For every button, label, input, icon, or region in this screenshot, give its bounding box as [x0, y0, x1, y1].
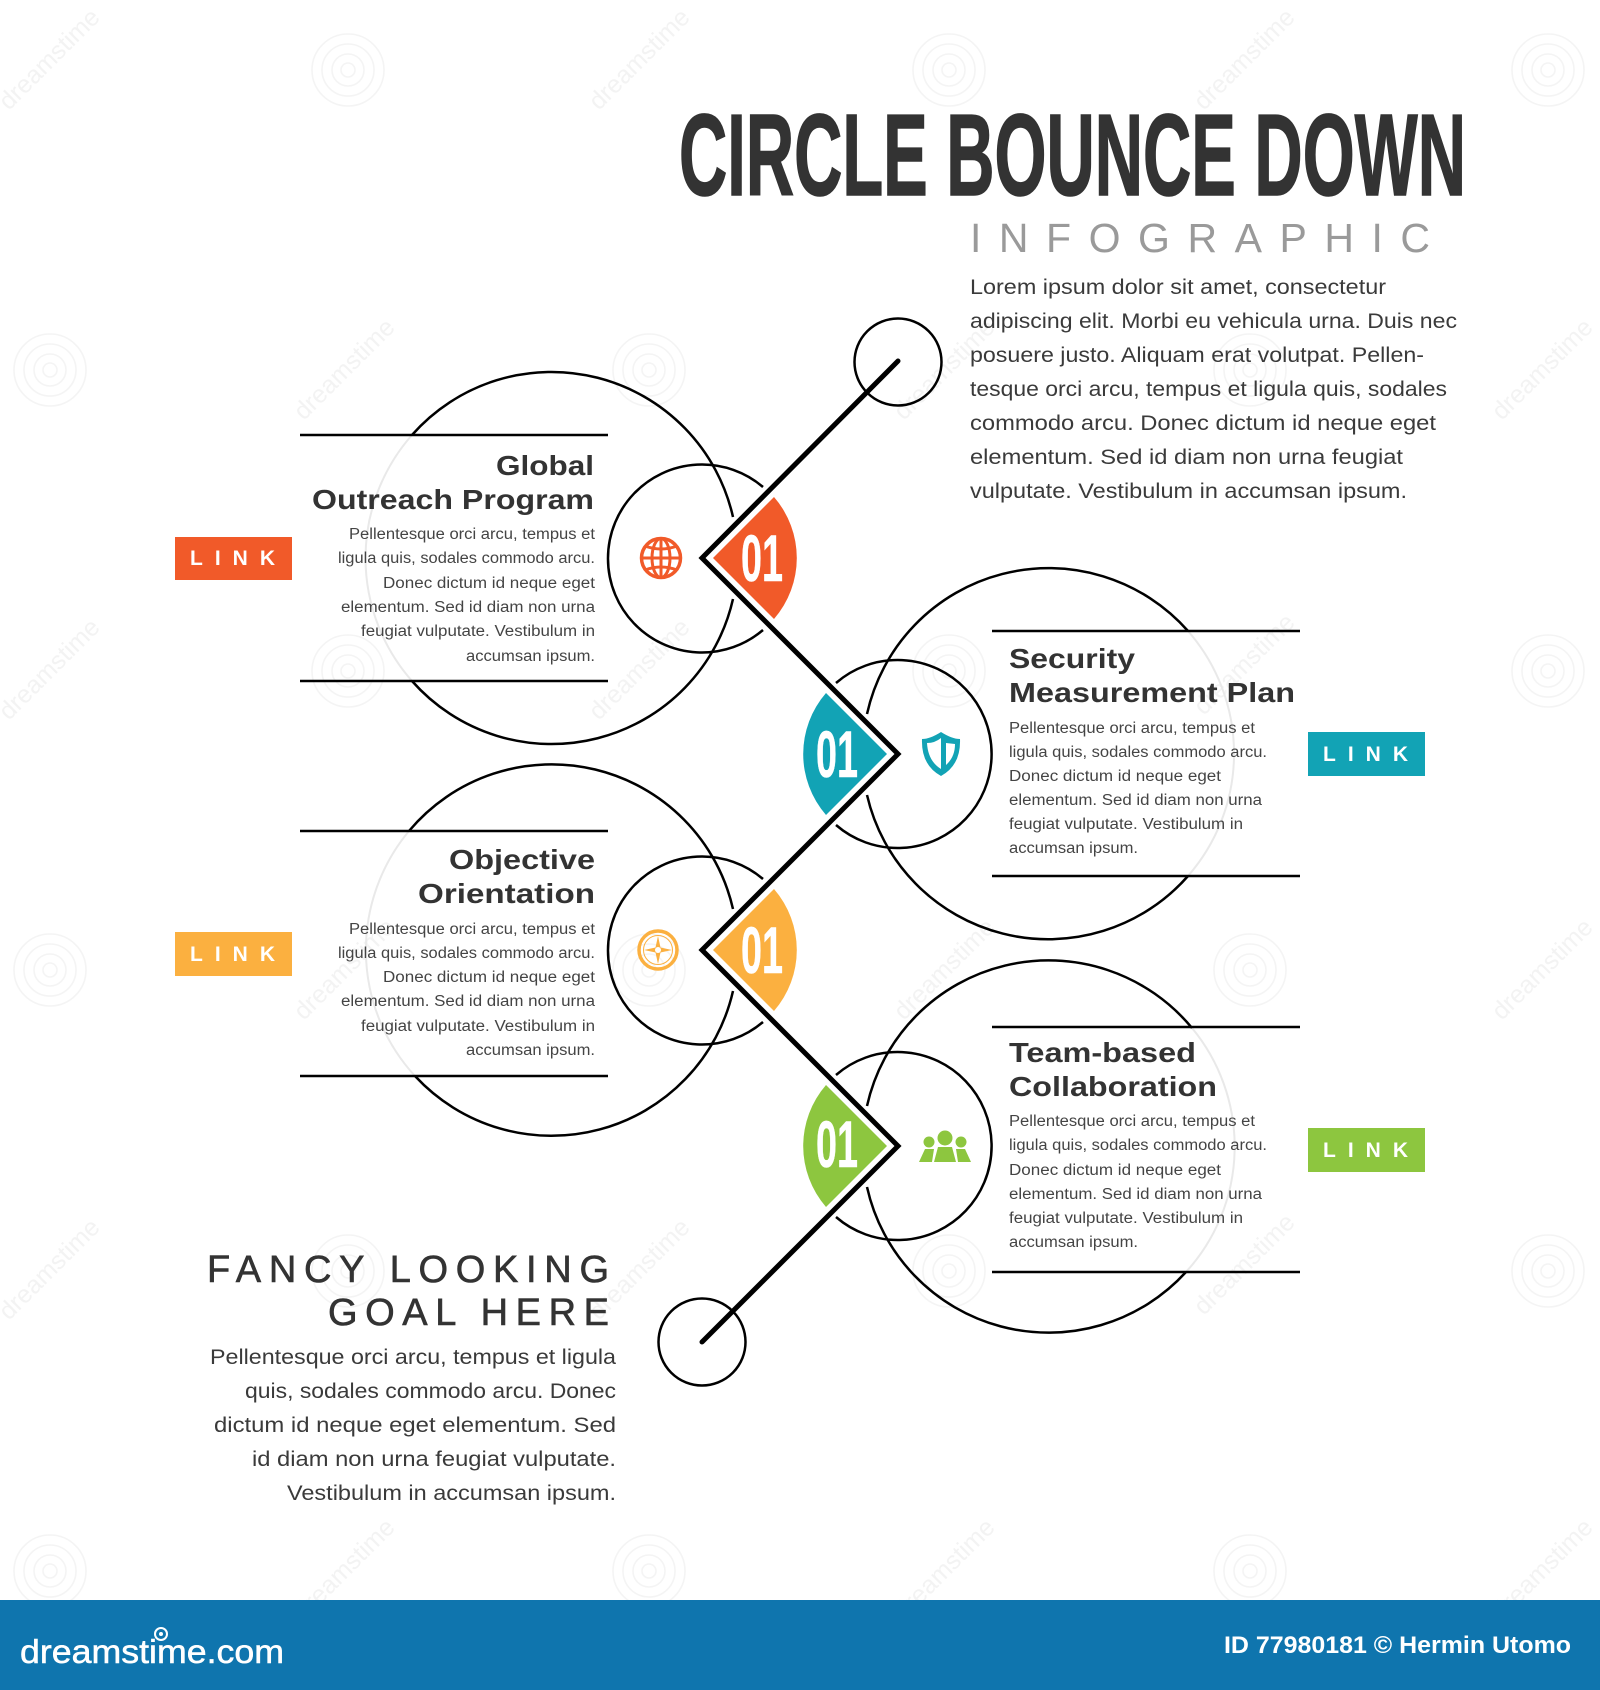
- intro text block: commodo arcu. Donec dictum id neque eget: [970, 412, 1436, 435]
- body text: ligula quis, sodales commodo arcu.: [338, 945, 595, 962]
- circles: [366, 372, 763, 744]
- footer credit: ID 77980181 © Hermin Utomo: [1224, 1632, 1571, 1659]
- footer logo: dreamstime.com: [20, 1633, 284, 1670]
- heading: [312, 450, 594, 515]
- body text: Donec dictum id neque eget: [383, 969, 596, 986]
- intro text block: adipiscing elit. Morbi eu vehicula urna. Duis nec: [970, 310, 1457, 333]
- body text: ligula quis, sodales commodo arcu.: [1009, 1137, 1267, 1154]
- body text: feugiat vulputate. Vestibulum in: [1009, 816, 1243, 833]
- circles: [836, 568, 1234, 939]
- circles: [836, 960, 1235, 1333]
- body text: feugiat vulputate. Vestibulum in: [1009, 1210, 1243, 1227]
- body text: Pellentesque orci arcu, tempus et: [1009, 720, 1256, 737]
- body text: Pellentesque orci arcu, tempus et: [349, 921, 596, 938]
- text: dreamstime: [583, 3, 695, 115]
- heading: [418, 844, 595, 909]
- icon: team: [919, 1130, 971, 1162]
- body text: ligula quis, sodales commodo arcu.: [1009, 744, 1267, 761]
- body text: Pellentesque orci arcu, tempus et: [349, 526, 596, 543]
- text: dreamstime: [288, 313, 400, 425]
- text: dreamstime: [583, 1213, 695, 1325]
- text: dreamstime: [888, 313, 1000, 425]
- intro text block: elementum. Sed id diam non urna feugiat: [970, 446, 1403, 469]
- text: dreamstime: [1486, 1513, 1598, 1625]
- intro text block: tesque orci arcu, tempus et ligula quis, sodales: [970, 378, 1447, 401]
- icon: shield: [922, 732, 960, 776]
- rules: [300, 831, 608, 1076]
- body text: feugiat vulputate. Vestibulum in: [361, 1018, 595, 1035]
- body text: accumsan ipsum.: [466, 648, 595, 665]
- number badge: 01: [816, 717, 858, 791]
- link button: LINK: [190, 547, 275, 570]
- goal heading: [207, 1249, 609, 1334]
- intro text block: [970, 276, 1457, 503]
- text: dreamstime: [288, 1513, 400, 1625]
- zigzag line: [702, 361, 898, 1342]
- heading: Global: [496, 450, 594, 481]
- goal text block: id diam non urna feugiat vulputate.: [252, 1448, 616, 1471]
- panel: security measurement plan: [803, 568, 1425, 939]
- body text: feugiat vulputate. Vestibulum in: [361, 623, 595, 640]
- goal text block: Vestibulum in accumsan ipsum.: [287, 1482, 616, 1505]
- text: dreamstime: [1486, 313, 1598, 425]
- body text: Donec dictum id neque eget: [1009, 768, 1222, 785]
- heading: Orientation: [418, 878, 595, 909]
- number badge: 01: [741, 521, 783, 595]
- link button: [1308, 1128, 1425, 1172]
- text: dreamstime: [583, 613, 695, 725]
- heading: Collaboration: [1009, 1071, 1217, 1102]
- number badge: [713, 497, 797, 619]
- body text: elementum. Sed id diam non urna: [1009, 1186, 1262, 1203]
- panel: objective orientation: [175, 764, 797, 1136]
- rules: [300, 435, 608, 681]
- text: dreamstime: [1486, 913, 1598, 1025]
- body text: [1009, 1113, 1267, 1251]
- heading: [1009, 1037, 1217, 1102]
- body text: Donec dictum id neque eget: [383, 575, 596, 592]
- body text: elementum. Sed id diam non urna: [341, 993, 595, 1010]
- goal heading: FANCY LOOKING: [207, 1249, 609, 1291]
- link button: LINK: [1323, 743, 1408, 766]
- link button: [175, 537, 292, 580]
- heading: Security: [1009, 643, 1135, 674]
- text: dreamstime: [1188, 1208, 1300, 1320]
- icon: compass: [639, 931, 677, 969]
- body text: Donec dictum id neque eget: [1009, 1162, 1222, 1179]
- rules: [992, 1027, 1300, 1272]
- link button: LINK: [1323, 1139, 1408, 1162]
- text: dreamstime: [1188, 3, 1300, 115]
- link button: [1308, 732, 1425, 776]
- body text: ligula quis, sodales commodo arcu.: [338, 550, 595, 567]
- heading: Outreach Program: [312, 484, 594, 515]
- goal text block: quis, sodales commodo arcu. Donec: [245, 1380, 616, 1403]
- body text: [338, 526, 596, 665]
- text: dreamstime: [888, 913, 1000, 1025]
- body text: [1009, 720, 1267, 857]
- number badge: [803, 693, 887, 815]
- text: dreamstime: [1188, 608, 1300, 720]
- end circle: top: [854, 318, 942, 406]
- number badge: [713, 889, 797, 1011]
- intro text block: posuere justo. Aliquam erat volutpat. Pellen-: [970, 344, 1424, 367]
- number badge: [803, 1085, 887, 1207]
- heading: Team-based: [1009, 1037, 1196, 1068]
- body text: elementum. Sed id diam non urna: [341, 599, 595, 616]
- body text: [338, 921, 596, 1059]
- text: dreamstime: [288, 913, 400, 1025]
- circles: [366, 764, 763, 1136]
- goal text block: [210, 1346, 616, 1505]
- rules: [992, 631, 1300, 876]
- number badge: 01: [741, 913, 783, 987]
- body text: accumsan ipsum.: [466, 1042, 595, 1059]
- link button: [175, 932, 292, 976]
- number badge: 01: [816, 1107, 858, 1181]
- intro text block: vulputate. Vestibulum in accumsan ipsum.: [970, 480, 1407, 503]
- heading: Objective: [449, 844, 595, 875]
- footer bar: [0, 1600, 1600, 1690]
- end circle: bottom: [658, 1298, 746, 1386]
- link button: LINK: [190, 943, 275, 966]
- text: dreamstime: [888, 1513, 1000, 1625]
- panel: global outreach program: [175, 372, 797, 744]
- icon: globe: [642, 538, 680, 578]
- heading: Measurement Plan: [1009, 677, 1295, 708]
- heading: [1009, 643, 1295, 708]
- body text: Pellentesque orci arcu, tempus et: [1009, 1113, 1256, 1130]
- goal text block: Pellentesque orci arcu, tempus et ligula: [210, 1346, 616, 1369]
- goal text block: dictum id neque eget elementum. Sed: [214, 1414, 616, 1437]
- subtitle: INFOGRAPHIC: [970, 215, 1430, 261]
- goal heading: GOAL HERE: [328, 1292, 609, 1334]
- body text: accumsan ipsum.: [1009, 1234, 1138, 1251]
- body text: elementum. Sed id diam non urna: [1009, 792, 1262, 809]
- panel: team-based collaboration: [803, 960, 1425, 1333]
- body text: accumsan ipsum.: [1009, 840, 1138, 857]
- intro text block: Lorem ipsum dolor sit amet, consectetur: [970, 276, 1386, 299]
